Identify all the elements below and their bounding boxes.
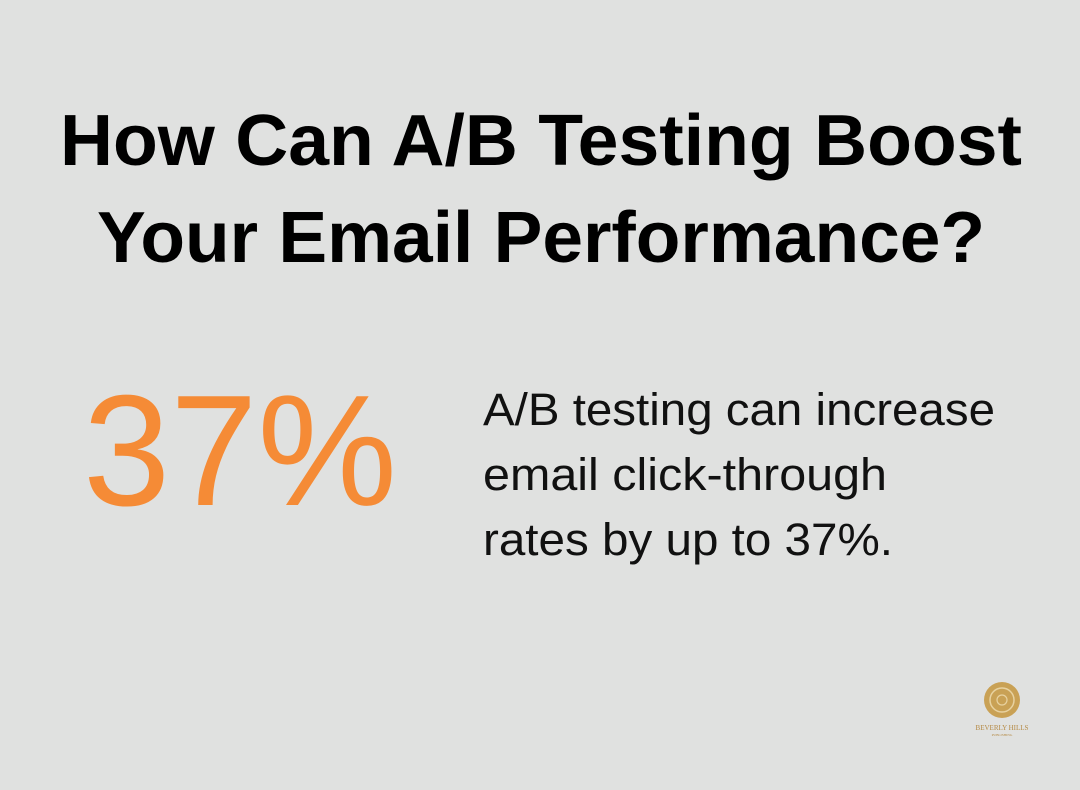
logo: Beverly Hills Publishing: [976, 682, 1029, 737]
logo: Beverly Hills Publishing: PUBLISHING: [992, 733, 1013, 737]
description text: rates by up to 37%.: [483, 514, 893, 565]
description text: email click-through: [483, 449, 887, 500]
big statistic: 37%: 37%: [83, 363, 397, 539]
title: How Can A/B Testing Boost: [60, 101, 1022, 181]
title: Your Email Performance?: [97, 198, 985, 278]
title: [60, 101, 1022, 278]
logo: Beverly Hills Publishing: BEVERLY HILLS: [976, 724, 1029, 732]
description text: A/B testing can increase: [483, 384, 995, 435]
description text: [483, 384, 995, 565]
